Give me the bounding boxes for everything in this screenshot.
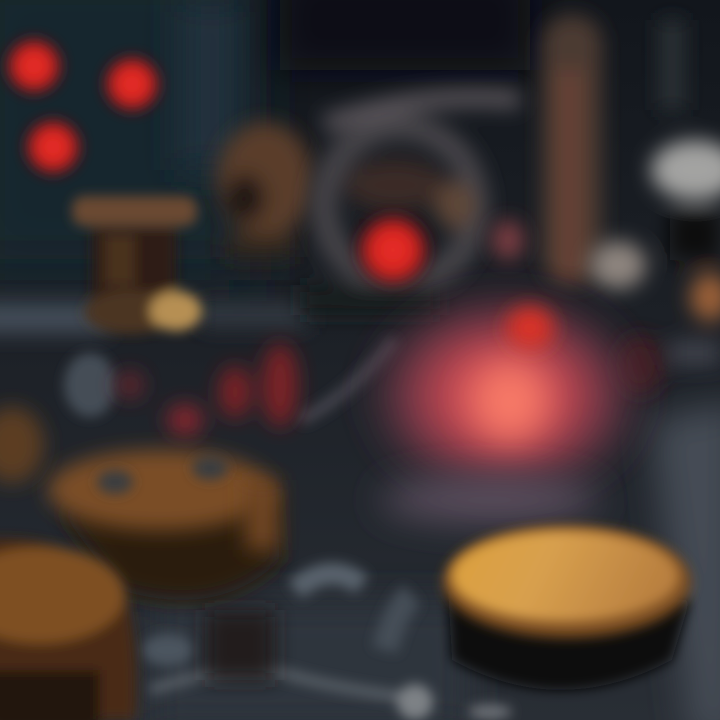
molecule node 3 bbox=[20, 114, 86, 180]
bright glow core bbox=[474, 364, 546, 440]
brown vessel left bbox=[72, 196, 202, 334]
wooden block bottom left bbox=[0, 539, 136, 720]
white dish bbox=[651, 140, 720, 200]
molecule node 2 bbox=[99, 51, 165, 117]
brown vessel upper centre bbox=[217, 122, 313, 257]
right side objects bbox=[492, 20, 720, 395]
grey silver swirls on table bbox=[64, 340, 512, 720]
wooden round block centre left bbox=[0, 407, 280, 600]
dish base bbox=[448, 590, 690, 690]
pale haze below glow bbox=[380, 478, 600, 522]
red energy glow bbox=[360, 285, 650, 505]
red molecules top left bbox=[1, 33, 165, 180]
golden dish bbox=[443, 526, 691, 690]
red molecule cluster centre bbox=[116, 343, 298, 436]
molecule node 1 bbox=[1, 33, 67, 99]
glowing red core bbox=[351, 208, 435, 292]
grey ring apparatus bbox=[300, 98, 520, 315]
small red spot above glow bbox=[506, 306, 554, 350]
tall brown column bbox=[542, 15, 602, 285]
dark stand under block bbox=[205, 610, 275, 680]
dish surface bbox=[451, 530, 679, 622]
dish rim bbox=[443, 526, 691, 638]
